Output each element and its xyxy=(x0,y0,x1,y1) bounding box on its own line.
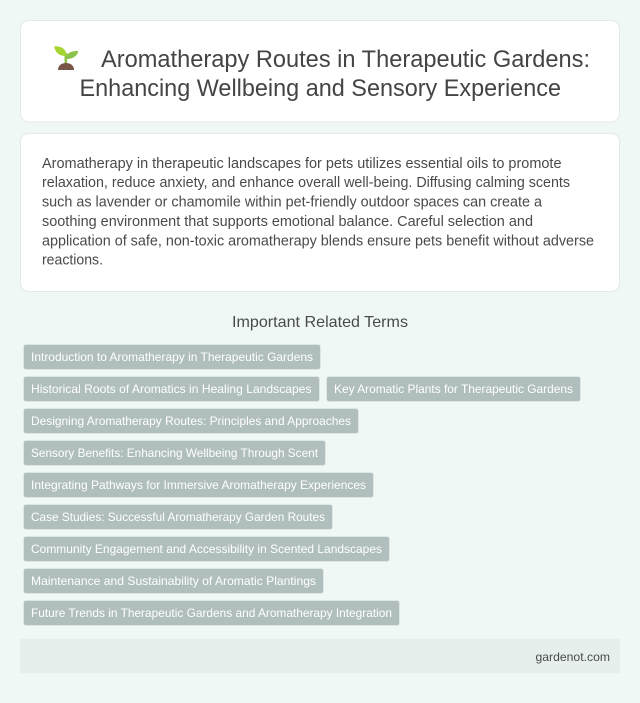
term chip: Future Trends in Therapeutic Gardens and Aromatherapy Integration xyxy=(31,606,392,620)
term chip xyxy=(326,376,580,402)
term chip xyxy=(24,408,358,434)
term chip: Community Engagement and Accessibility in Scented Landscapes xyxy=(31,542,382,556)
term chip xyxy=(24,376,320,402)
term chip: Integrating Pathways for Immersive Aromatherapy Experiences xyxy=(31,478,366,492)
term chip: Sensory Benefits: Enhancing Wellbeing Through Scent xyxy=(31,446,319,460)
panel: title card xyxy=(20,20,620,122)
icon: seedling xyxy=(54,46,78,70)
term chip xyxy=(24,504,332,530)
panel: description xyxy=(20,134,620,292)
term chip: Case Studies: Successful Aromatherapy Garden Routes xyxy=(31,510,325,524)
footer text: gardenot.com xyxy=(536,650,610,664)
term chip xyxy=(24,568,324,594)
term chip xyxy=(24,440,326,466)
term chip xyxy=(24,472,374,498)
term chip: Maintenance and Sustainability of Aromatic Plantings xyxy=(31,574,316,588)
description text: relaxation, reduce anxiety, and enhance overall well-being. Diffusing calming scents xyxy=(42,175,570,191)
term chip: Introduction to Aromatherapy in Therapeutic Gardens xyxy=(31,350,313,364)
title: Enhancing Wellbeing and Sensory Experience xyxy=(80,75,561,102)
description text: application of safe, non-toxic aromatherapy blends ensure pets benefit without adverse xyxy=(42,234,594,250)
term chip xyxy=(24,344,320,370)
term chip: Designing Aromatherapy Routes: Principles and Approaches xyxy=(31,414,351,428)
heading: related terms: Important Related Terms xyxy=(232,314,408,331)
footer xyxy=(20,639,620,673)
description text: such as lavender or chamomile within pet-friendly outdoor spaces can create a xyxy=(42,194,542,210)
term chip xyxy=(24,536,390,562)
description text xyxy=(42,156,594,268)
term chip: Key Aromatic Plants for Therapeutic Gardens xyxy=(334,382,573,396)
related terms list xyxy=(24,344,580,626)
title xyxy=(80,46,590,102)
description text: Aromatherapy in therapeutic landscapes for pets utilizes essential oils to promote xyxy=(42,156,562,172)
term chip: Historical Roots of Aromatics in Healing Landscapes xyxy=(31,382,312,396)
title: Aromatherapy Routes in Therapeutic Gardens: xyxy=(101,46,590,73)
description text: soothing environment that supports emotional balance. Careful selection and xyxy=(42,214,533,230)
term chip xyxy=(24,600,400,626)
description text: reactions. xyxy=(42,252,103,268)
